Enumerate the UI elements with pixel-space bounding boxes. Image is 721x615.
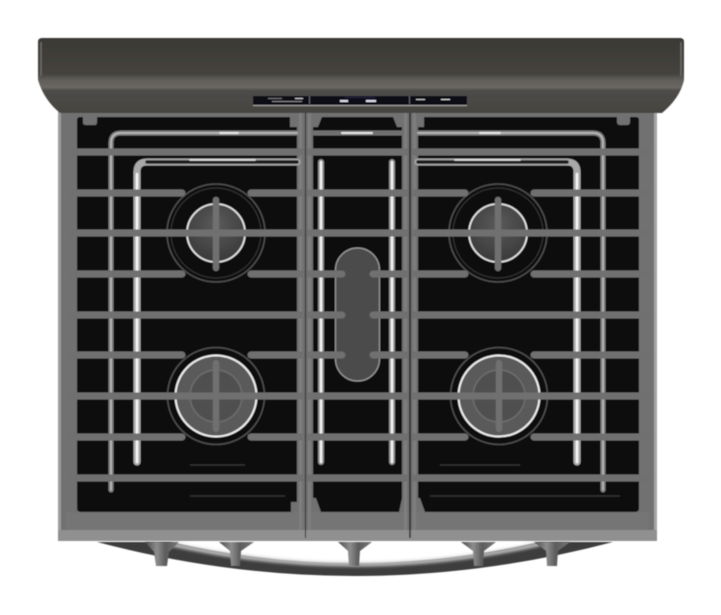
burner: top right (446, 181, 550, 285)
cooktop body (58, 110, 657, 541)
left grate bars (72, 152, 303, 478)
chrome burner tubes (111, 133, 603, 490)
left outer tube (111, 133, 297, 490)
control display panel (253, 96, 467, 106)
reflections in the wells (190, 465, 620, 496)
burner: bottom right (447, 344, 551, 448)
left inner tube (137, 160, 297, 462)
left well (77, 117, 297, 512)
right well (418, 117, 639, 512)
backguard hood (38, 38, 684, 113)
right outer tube (418, 133, 603, 490)
centre well (313, 117, 402, 512)
right inner tube (418, 160, 577, 462)
knob 2 (219, 542, 254, 566)
centre grate bars (309, 152, 407, 478)
burner: bottom left (164, 344, 268, 448)
right grate bars (413, 152, 646, 478)
knob 1 (145, 542, 179, 566)
centre horizontal tube (314, 130, 402, 136)
knob 4 (461, 542, 496, 566)
centre left tube (318, 162, 324, 462)
grate bars (72, 152, 646, 478)
shadow arc under the range (97, 542, 613, 576)
grate seams (306, 113, 410, 538)
knob 3 (338, 542, 372, 566)
centre oval burner (336, 248, 380, 381)
burner cross arms (216, 200, 499, 429)
centre right tube (389, 162, 395, 462)
control knobs (145, 542, 570, 566)
burner: top left (164, 181, 268, 285)
knob 5 (534, 542, 570, 566)
